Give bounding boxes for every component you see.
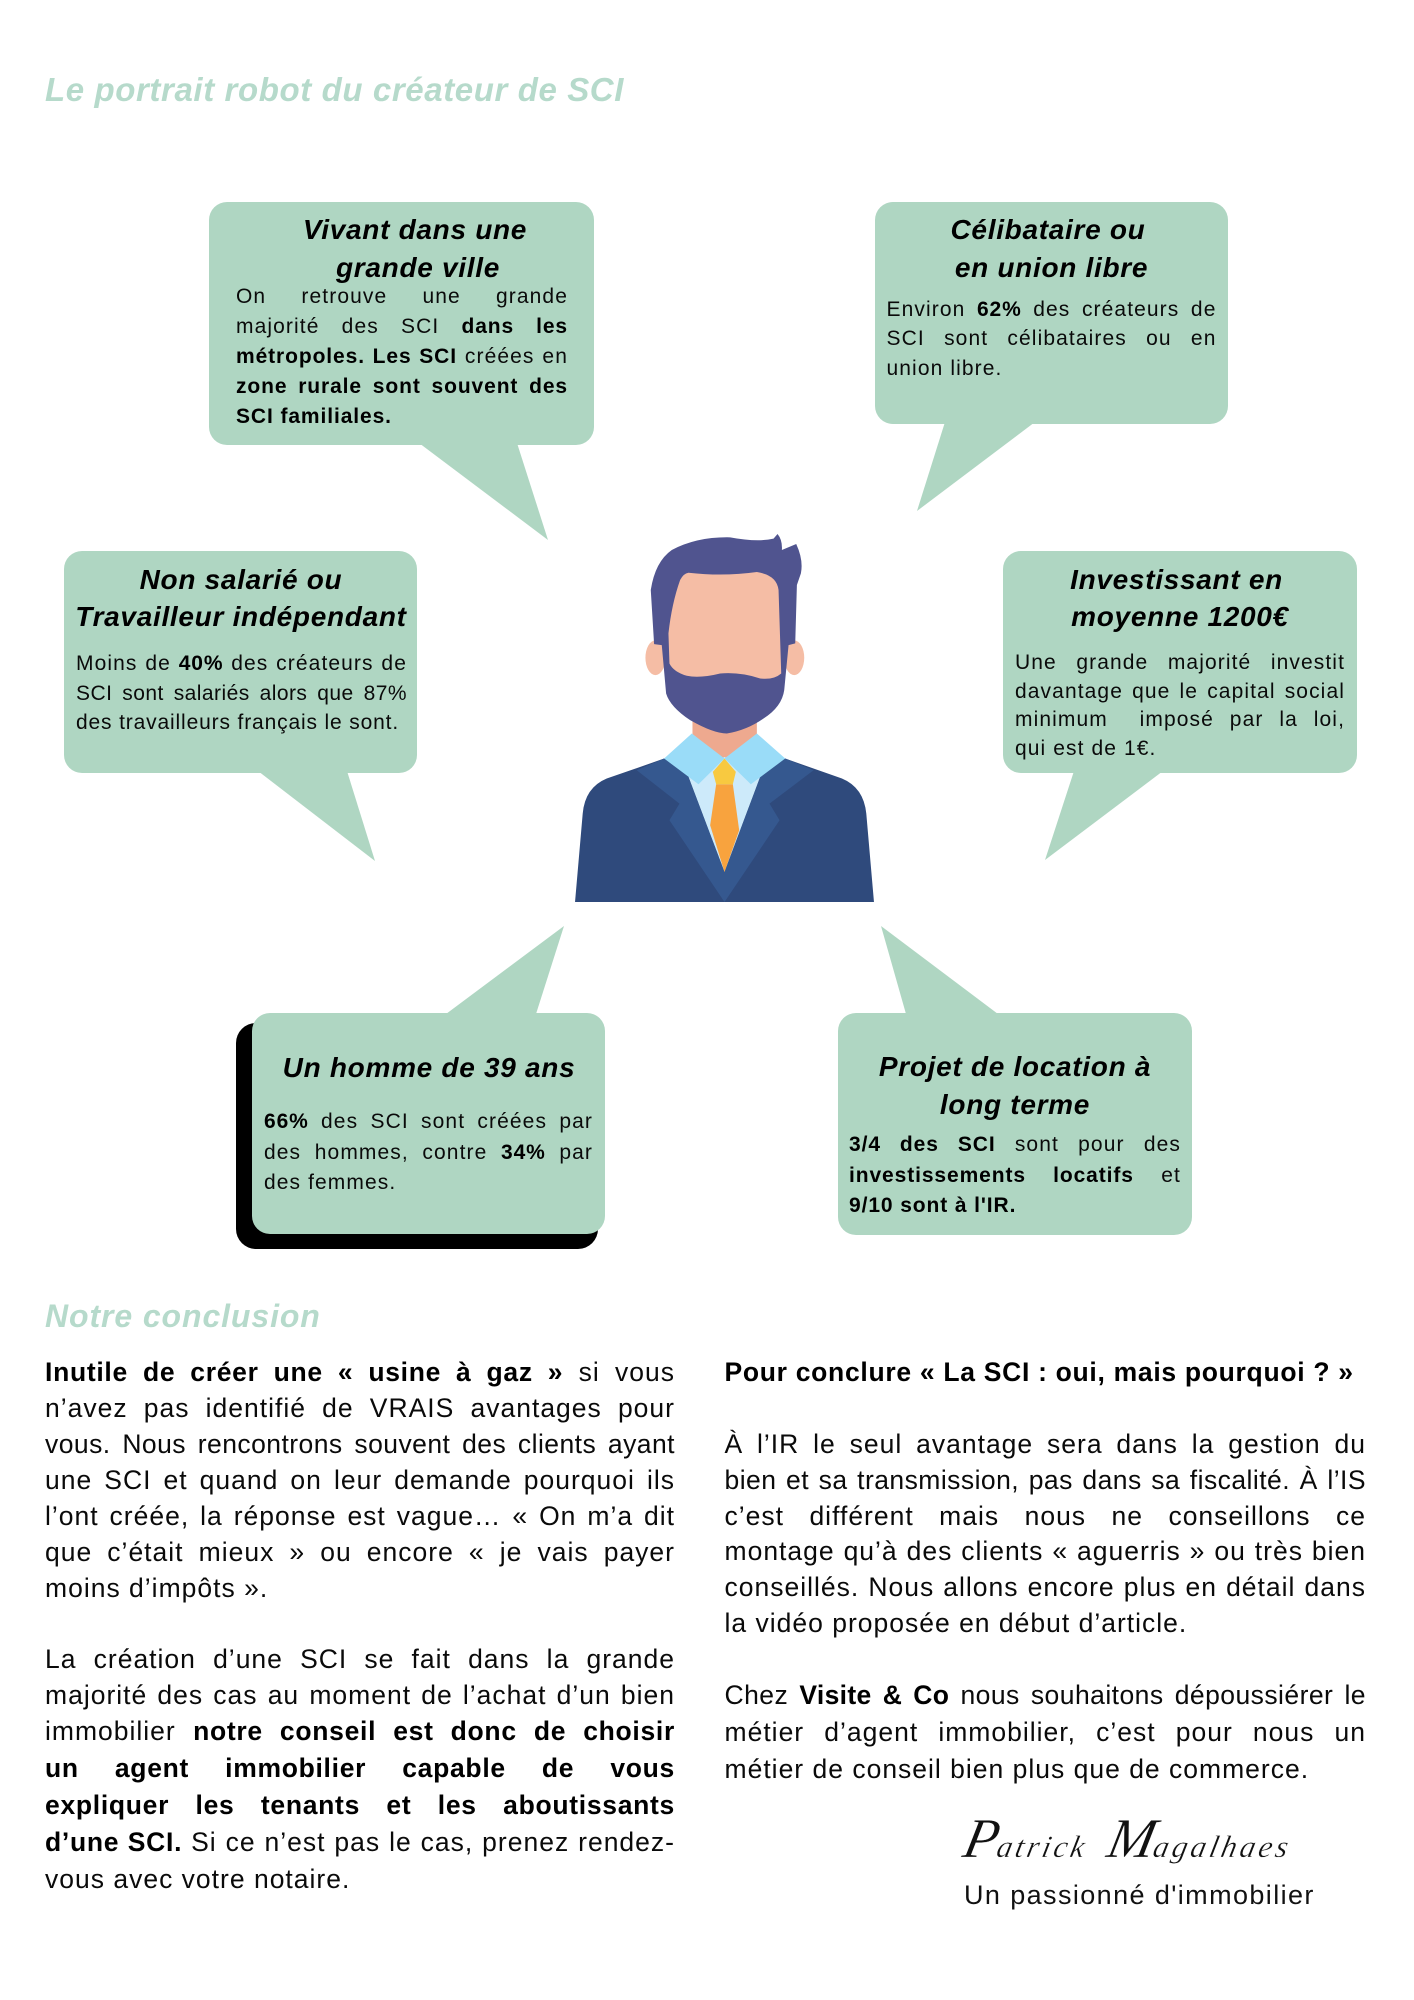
text: La création d'une SCI: La création d’une SCI se fait dans la grande (45, 1644, 675, 1674)
face (668, 572, 781, 679)
text: Inutile de créer une usine à gaz: que c’était mieux » ou encore « je vais payer (45, 1537, 675, 1567)
signature: Patrick Magalhaes: agalhaes (1150, 1829, 1295, 1864)
signature: Patrick Magalhaes: atrick (994, 1829, 1091, 1864)
text: Inutile de créer une usine à gaz (45, 1357, 675, 1603)
heading: Vivant dans une grande ville: grande ville (336, 252, 500, 283)
heading: Un homme de 39 ans: Un homme de 39 ans (283, 1052, 575, 1083)
text: Inutile de créer une usine à gaz: n’avez pas identifié de VRAIS avantages pour (45, 1393, 675, 1423)
heading: Pour conclure: Pour conclure « La SCI : oui, mais pourquoi ? » (724, 1357, 1354, 1387)
text: Non salarié ou Travailleur indépendant: des travailleurs français le sont. (76, 711, 399, 734)
text: Un homme de 39 ans: 66% des SCI sont créées par (264, 1110, 593, 1133)
tie (710, 784, 739, 872)
text: Inutile de créer une usine à gaz: moins d’impôts ». (45, 1573, 268, 1603)
heading: Investissant en moyenne 1200€: Investissant en (1070, 564, 1283, 595)
panel: Non salarié ou Travailleur indépendant (64, 551, 417, 861)
text: Non salarié ou Travailleur indépendant: SCI sont salariés alors que 87% (76, 682, 407, 704)
heading: Investissant en moyenne 1200€ (1070, 564, 1290, 632)
text: Inutile de créer une usine à gaz: vous. Nous rencontrons souvent des clients ayant (45, 1429, 675, 1459)
text: Vivant dans une grande ville: zone rurale sont souvent des (236, 375, 568, 398)
lapels (637, 759, 814, 902)
shirt (688, 757, 760, 872)
text: À l'IR le seul avantage: conseillés. Nous allons encore plus en détail dans (724, 1572, 1366, 1602)
text: Inutile de créer une usine à gaz: une SCI et quand on leur demande pourquoi ils (45, 1465, 675, 1495)
text: La création d'une SCI: vous avec votre notaire. (45, 1864, 350, 1894)
text: Investissant en moyenne 1200€ (1015, 651, 1345, 760)
heading: Célibataire ou en union libre: en union libre (955, 252, 1148, 283)
text: Vivant dans une grande ville: majorité des SCI dans les (236, 315, 568, 338)
hair and beard (651, 534, 802, 734)
text: La création d'une SCI: majorité des cas au moment de l’achat d’un bien (45, 1680, 675, 1710)
text: À l'IR le seul avantage: la vidéo proposée en début d’article. (724, 1608, 1187, 1638)
panel: Investissant en moyenne 1200€ (1003, 551, 1357, 860)
text: Investissant en moyenne 1200€: minimum imposé par la loi, (1015, 708, 1345, 731)
text: À l'IR le seul avantage (724, 1429, 1366, 1638)
title: Le portrait robot du créateur de SCI (45, 71, 624, 108)
text: Chez Visite & Co (724, 1680, 1366, 1784)
collar (664, 734, 785, 784)
text: Célibataire ou en union libre: union libre. (886, 356, 1002, 380)
panel: Célibataire ou en union libre (875, 202, 1228, 511)
text: Projet de location à long terme: investissements locatifs et (849, 1164, 1181, 1186)
text: Célibataire ou en union libre (886, 298, 1216, 380)
text: Un homme de 39 ans: des femmes. (264, 1171, 396, 1194)
panel: Vivant dans une grande ville (209, 202, 594, 540)
text: Un passionné d'immobilier: Un passionné d'immobilier (964, 1880, 1315, 1910)
heading: Non salarié ou Travailleur indépendant: Non salarié ou (140, 564, 342, 595)
heading: Célibataire ou en union libre (951, 214, 1148, 283)
text: À l'IR le seul avantage: bien et sa transmission, pas dans sa fiscalité. À l’IS (724, 1465, 1366, 1495)
text: Célibataire ou en union libre: SCI sont célibataires ou en (886, 327, 1216, 350)
text: Investissant en moyenne 1200€: davantage que le capital social (1015, 680, 1345, 702)
heading: Investissant en moyenne 1200€: moyenne 1200€ (1071, 600, 1289, 632)
text: Vivant dans une grande ville: SCI familiales. (236, 405, 392, 428)
text: Projet de location à long terme: 9/10 sont à l'IR. (849, 1194, 1016, 1217)
heading: Vivant dans une grande ville (303, 214, 527, 283)
illustration: businessman portrait (575, 534, 874, 902)
text: Célibataire ou en union libre: Environ 62% des créateurs de (886, 298, 1216, 320)
text: La création d'une SCI: un agent immobilier capable de vous (45, 1753, 675, 1783)
text: La création d'une SCI: immobilier notre conseil est donc de choisir (45, 1716, 675, 1746)
ears (645, 640, 804, 675)
heading: Notre conclusion: Notre conclusion (45, 1298, 321, 1334)
text: Investissant en moyenne 1200€: Une grande majorité investit (1015, 651, 1345, 674)
heading: Non salarié ou Travailleur indépendant (75, 564, 407, 632)
panel: Un homme de 39 ans (236, 926, 605, 1249)
text: Investissant en moyenne 1200€: qui est de 1€. (1015, 736, 1156, 760)
text: Inutile de créer une usine à gaz: Inutile de créer une « usine à gaz » si vous (45, 1357, 675, 1387)
text: Un homme de 39 ans (264, 1110, 593, 1194)
text: Non salarié ou Travailleur indépendant (76, 652, 407, 734)
text: Non salarié ou Travailleur indépendant: Moins de 40% des créateurs de (76, 652, 407, 675)
neck (692, 717, 757, 760)
text: À l'IR le seul avantage: montage qu’à des clients « aguerris » ou très bien (724, 1536, 1366, 1566)
text: Vivant dans une grande ville (236, 285, 568, 428)
text: Projet de location à long terme (849, 1133, 1181, 1217)
text: Chez Visite & Co: métier d’agent immobilier, c’est pour nous un (724, 1717, 1366, 1747)
heading: Projet de location à long terme: long terme (940, 1089, 1090, 1120)
signature: Patrick Magalhaes (957, 1815, 1295, 1870)
heading: Célibataire ou en union libre: Célibataire ou (951, 214, 1145, 245)
text: Vivant dans une grande ville: On retrouve une grande (236, 285, 568, 308)
text: La création d'une SCI: expliquer les tenants et les aboutissants (45, 1790, 675, 1820)
text: Chez Visite & Co: Chez Visite & Co nous souhaitons dépoussiérer le (724, 1680, 1366, 1710)
text: Projet de location à long terme: 3/4 des SCI sont pour des (849, 1133, 1181, 1156)
heading: Projet de location à long terme (879, 1051, 1151, 1120)
heading: Non salarié ou Travailleur indépendant: Travailleur indépendant (75, 601, 407, 632)
text: La création d'une SCI (45, 1644, 675, 1894)
text: À l'IR le seul avantage: À l’IR le seul avantage sera dans la gestion du (724, 1429, 1366, 1459)
text: La création d'une SCI: d’une SCI. Si ce n’est pas le cas, prenez rendez- (45, 1827, 675, 1857)
heading: Vivant dans une grande ville: Vivant dans une (303, 214, 527, 245)
text: Inutile de créer une usine à gaz: l’ont créée, la réponse est vague… « On m’a dit (45, 1501, 675, 1531)
jacket (575, 759, 874, 902)
text: À l'IR le seul avantage: c’est différent mais nous ne conseillons ce (724, 1501, 1366, 1531)
text: Vivant dans une grande ville: métropoles. Les SCI créées en (236, 345, 568, 368)
text: Chez Visite & Co: métier de conseil bien plus que de commerce. (724, 1754, 1309, 1784)
heading: Projet de location à long terme: Projet de location à (879, 1051, 1151, 1082)
tie knot (713, 759, 736, 784)
panel: Projet de location à long terme (838, 926, 1192, 1235)
text: Un homme de 39 ans: des hommes, contre 34% par (264, 1140, 593, 1164)
